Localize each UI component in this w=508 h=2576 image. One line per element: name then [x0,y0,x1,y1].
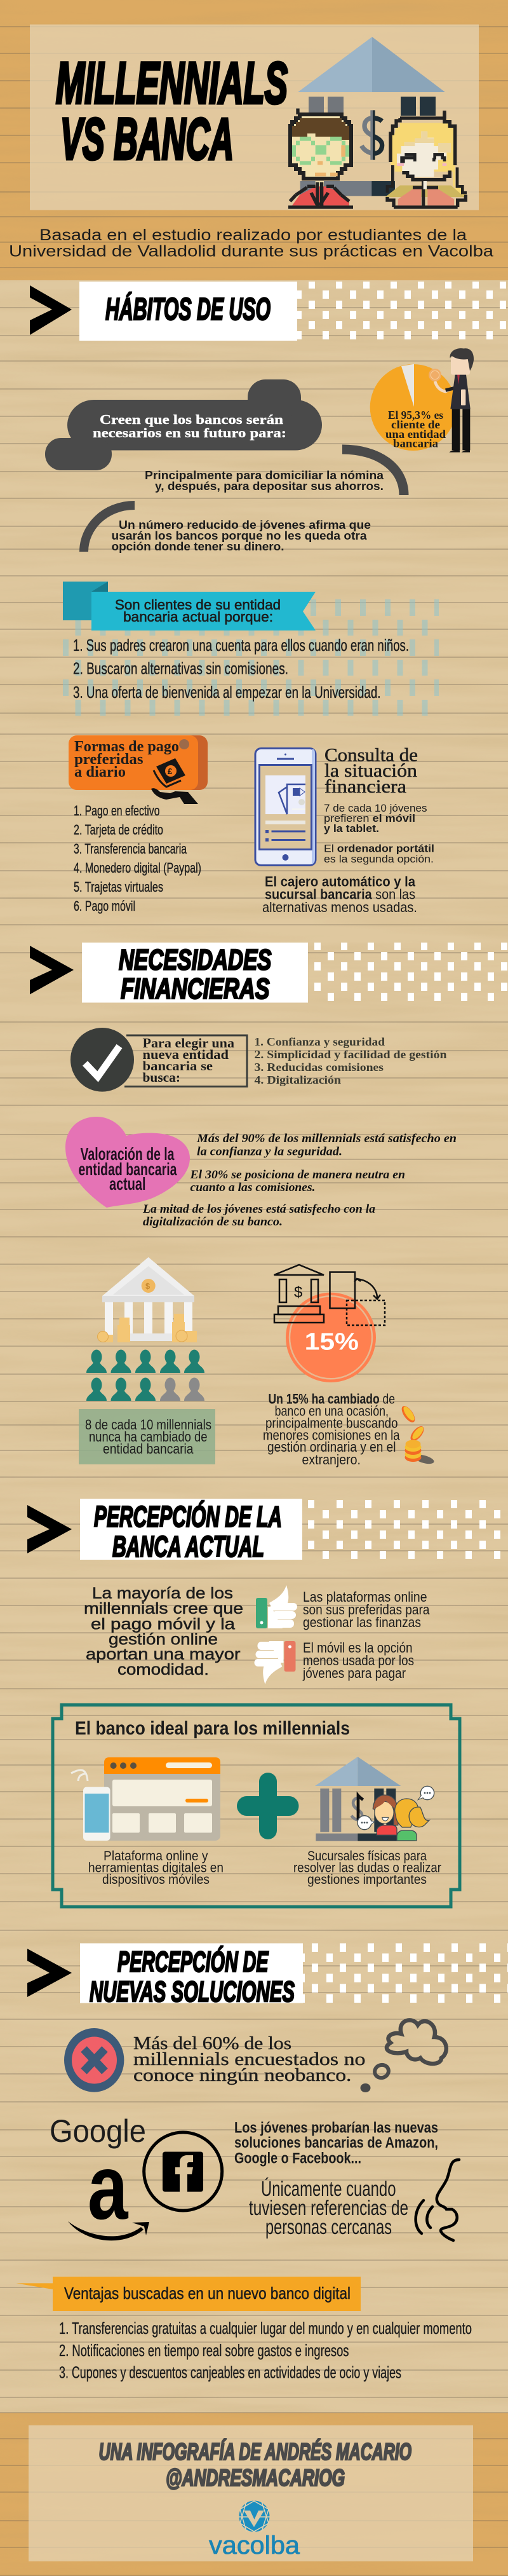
text: únicamente: Únicamente cuando [261,2177,396,2200]
list: criteria: 4. Digitalización [254,1073,341,1086]
text: la mayoría [84,1584,243,1679]
callout: 8 de cada 10: entidad bancaria [103,1441,194,1457]
icon: money in hand [151,758,198,804]
icon: bank with two pixel millennials [288,37,467,207]
icon: check mark [70,1028,134,1092]
logo: amazon [68,2136,149,2240]
panel: para elegir una nueva entidad: Para elegir una [142,1035,235,1051]
text: cajero automático [262,874,417,915]
text: sucursales físicas [293,1849,441,1887]
text: consulta de la situación financiera: financiera [324,776,406,797]
icon: plus [237,1773,298,1839]
text: únicamente [249,2177,408,2239]
text: jóvenes probarían: Los jóvenes probarían las nuevas [234,2120,438,2137]
icon: thumb up [256,1585,297,1628]
text: móvil opción: menos usada por los [303,1653,414,1668]
text: satisfaction: cuanto a las comisiones. [190,1181,315,1194]
stat: 15% [286,1293,376,1382]
list: advantages [59,2319,472,2382]
subtitle [9,226,493,261]
people chart: 8 of 10 [86,1350,204,1401]
section heading: necesidades financieras: FINANCIERAS [121,972,269,1005]
list: payment methods: 5. Trajetas virtuales [74,879,163,895]
title [56,51,288,172]
list: criteria: 1. Confianza y seguridad [254,1035,385,1048]
section heading: necesidades financieras [30,943,508,1005]
icon: smartphone [255,749,316,866]
text: satisfaction: La mitad de los jóvenes está satisfecho con la [142,1203,376,1216]
ribbon: son clientes: bancaria actual porque: [123,609,273,625]
section heading: percepción de nuevas soluciones: PERCEPCIÓN DE [117,1946,269,1978]
pie chart: 95,3%: El 95,3% es [388,409,443,421]
text: únicamente: tuviesen referencias de [249,2196,408,2219]
section heading: percepción de nuevas soluciones: NUEVAS SOLUCIONES [90,1975,295,2008]
text: sucursales físicas: Sucursales físicas para [307,1849,427,1864]
arc decoration and text: no option: usarán los bancos porque no les queda otra [112,529,368,542]
text: consulta de la situación financiera: es la segunda opción. [324,853,434,865]
panel: formas de pago [69,735,208,804]
panel: el banco ideal [53,1705,460,1907]
text: la mayoría: aportan una mayor [86,1646,241,1663]
callout: future need of banks: Creen que los bancos serán [100,412,283,427]
label: ventajas buscadas [17,2277,361,2311]
list: payment methods: 3. Transferencia bancaria [74,841,187,857]
icon: falling coins [399,1404,435,1466]
footer panel [29,2425,473,2561]
text: consulta de la situación financiera: El ordenador portátil [324,843,434,855]
text: sucursales físicas: gestiones importantes [307,1872,427,1887]
panel: para elegir una nueva entidad [124,1035,247,1087]
text: 15% ha cambiado: gestión ordinaria y en el [267,1439,396,1455]
text: consulta de la situación financiera: 7 de cada 10 jóvenes [324,802,427,814]
list: criteria: 2. Simplicidad y facilidad de gestión [254,1048,447,1061]
icon: cross circle [64,2028,124,2092]
text: consulta de la situación financiera: y la tablet. [324,822,379,835]
footer credits [99,2439,411,2491]
text: plataformas online: Las plataformas online [303,1589,427,1605]
logo: google: Google [50,2113,146,2149]
section heading: percepción de la banca actual: PERCEPCIÓN DE LA [94,1500,282,1533]
text: satisfaction: El 30% se posiciona de manera neutra en [189,1168,405,1182]
text: únicamente: personas cercanas [265,2215,392,2239]
text: 15% ha cambiado: Un 15% ha cambiado de [268,1391,395,1407]
text: más del 60%: millennials encuestados no [133,2050,366,2069]
heart: valoración: Valoración de la [80,1144,175,1164]
text: consulta de la situación financiera [324,745,434,865]
callout: future need of banks: necesarios en su futuro para: [93,425,286,440]
pie chart: 95,3%: una entidad [385,428,446,440]
icon: thought cloud [361,2020,446,2092]
dashed teal pattern [63,599,439,716]
list: reasons: 2. Buscaron alternativas sin comisiones. [73,658,288,678]
section heading: hábitos de uso: HÁBITOS DE USO [105,292,271,327]
section heading: necesidades financieras: NECESIDADES [119,943,272,976]
logo: amazon: a [88,2136,129,2239]
ribbon: son clientes: Son clientes de su entidad [115,597,281,613]
text: la mayoría: el pago móvil y la [91,1616,235,1633]
title: VS BANCA [60,107,234,172]
text: móvil opción: jóvenes para pagar [302,1665,406,1681]
text: la mayoría: comodidad. [117,1661,209,1679]
arc decoration and text: no option: Un número reducido de jóvenes afirma que [119,519,371,531]
icon: change of bank: $ [294,1284,302,1301]
text: cajero automático: alternativas menos usadas. [262,899,417,915]
text: jóvenes probarían: Google o Facebook... [234,2150,361,2167]
list: payment methods: 1. Pago en efectivo [74,803,160,819]
panel: para elegir una nueva entidad: bancaria se [142,1058,213,1073]
text: la mayoría: gestión online [109,1631,218,1649]
text: jóvenes probarían [234,2120,438,2167]
text: jóvenes probarían: soluciones bancarias de Amazon, [234,2134,438,2151]
list: criteria: 3. Reducidas comisiones [254,1061,384,1073]
icon: thumb down [254,1641,296,1684]
text: la mayoría: La mayoría de los [92,1584,233,1602]
text: plataformas online: son sus preferidas para [303,1602,430,1618]
subtitle: Universidad de Valladolid durante sus prácticas en Vacolba [9,243,493,261]
icon: businessman with coin [429,348,474,453]
list: criteria [254,1035,447,1086]
section heading: percepción de nuevas soluciones [27,1944,508,2008]
label: ventajas buscadas: Ventajas buscadas en un nuevo banco digital [64,2284,351,2303]
icon: classic white bank with coins [98,1257,197,1342]
callout: 8 de cada 10: nunca ha cambiado de [89,1429,207,1445]
icon: nose and smell waves [416,2160,459,2240]
callout: 8 de cada 10 [79,1409,215,1464]
text: más del 60%: conoce ningún neobanco. [133,2066,352,2085]
arc decoration and text: no option [84,505,371,553]
panel: formas de pago: Formas de pago [74,739,179,755]
arc decoration and text: no option: opción donde tener su dinero. [112,540,284,553]
text: plataforma online: Plataforma online y [104,1849,208,1864]
arc decoration and text: nómina [145,449,404,495]
section heading: percepción de la banca actual [27,1499,508,1563]
panel: para elegir una nueva entidad: busca: [142,1070,180,1085]
section heading: percepción de la banca actual: BANCA ACTUAL [112,1530,264,1563]
text: 15% ha cambiado: principalmente buscando [265,1415,398,1431]
pie chart: 95,3%: cliente de [391,418,440,431]
text: la mayoría: millennials cree que [84,1600,243,1618]
text: 15% ha cambiado: extranjero. [302,1452,361,1468]
text: plataformas online [303,1589,430,1630]
callout: future need of banks [45,379,322,470]
text: plataformas online: gestionar las finanzas [303,1614,421,1630]
text: plataforma online [88,1849,224,1887]
text: satisfaction: la confianza y la seguridad. [197,1145,342,1158]
icon: classic white bank with coins: $ [145,1281,150,1291]
text: satisfaction: digitalización de su banco. [143,1215,283,1229]
list: advantages: 2. Notificaciones en tiempo real sobre gastos e ingresos [59,2341,349,2360]
list: payment methods [74,803,201,914]
text: móvil opción: El móvil es la opción [303,1640,413,1656]
list: reasons [73,636,409,702]
icon: change of bank [274,1265,385,1325]
text: 15% ha cambiado [263,1391,400,1468]
text: satisfaction [142,1132,457,1229]
text: más del 60% [133,2034,366,2085]
panel: para elegir una nueva entidad: nueva entidad [142,1047,229,1062]
text: móvil opción [302,1640,414,1681]
pie chart: 95,3% [370,364,457,451]
panel: formas de pago: preferidas [74,751,144,768]
icon: web platform and phone [71,1757,220,1841]
title panel [30,24,479,210]
text: cajero automático: sucursal bancaria son las [265,886,415,903]
text: satisfaction: Más del 90% de los millennials está satisfecho en [196,1132,457,1145]
heart: valoración [65,1117,190,1208]
logo: vacolba [209,2500,300,2559]
title: MILLENNIALS [56,51,288,116]
list: payment methods: 6. Pago móvil [74,898,135,914]
text: cajero automático: El cajero automático y la [265,874,416,890]
callout: 8 de cada 10: 8 de cada 10 millennials [85,1417,211,1433]
panel: formas de pago: a diario [74,764,126,780]
subtitle: Basada en el estudio realizado por estudiantes de la [39,226,467,244]
ribbon: son clientes [63,582,316,630]
section heading: hábitos de uso [30,282,508,341]
text: 15% ha cambiado: menores comisiones en la [263,1428,400,1443]
text: consulta de la situación financiera: prefieren el móvil [324,812,415,824]
text: plataforma online: herramientas digitales en [88,1861,224,1875]
icon: money in hand: £ [168,767,173,776]
heart: valoración: actual [109,1174,146,1194]
text: 15% ha cambiado: banco en una ocasión, [275,1403,389,1419]
pie chart: 95,3%: bancaria [393,437,438,450]
logo: facebook [144,2132,222,2211]
text: plataforma online: dispositivos móviles [102,1872,210,1887]
text: sucursales físicas: resolver las dudas o realizar [293,1861,441,1875]
text: consulta de la situación financiera: Consulta de [324,745,418,765]
footer credits: @ANDRESMACARIOG [166,2465,345,2491]
text: consulta de la situación financiera: la situación [324,760,417,781]
logo: vacolba: vacolba [209,2532,300,2559]
list: payment methods: 4. Monedero digital (Paypal) [74,860,201,876]
arc decoration and text: nómina: y, después, para depositar sus ahorros. [155,480,384,493]
list: payment methods: 2. Tarjeta de crédito [74,822,163,838]
arc decoration and text: nómina: Principalmente para domiciliar la nómina [145,469,384,482]
text: más del 60%: Más del 60% de los [133,2034,291,2054]
stat: 15%: 15% [305,1329,359,1356]
heart: valoración: entidad bancaria [79,1159,177,1179]
list: reasons: 3. Una oferta de bienvenida al empezar en la Universidad. [73,683,381,702]
icon: bank with two women [315,1757,434,1841]
panel: el banco ideal: El banco ideal para los millennials [75,1718,350,1739]
